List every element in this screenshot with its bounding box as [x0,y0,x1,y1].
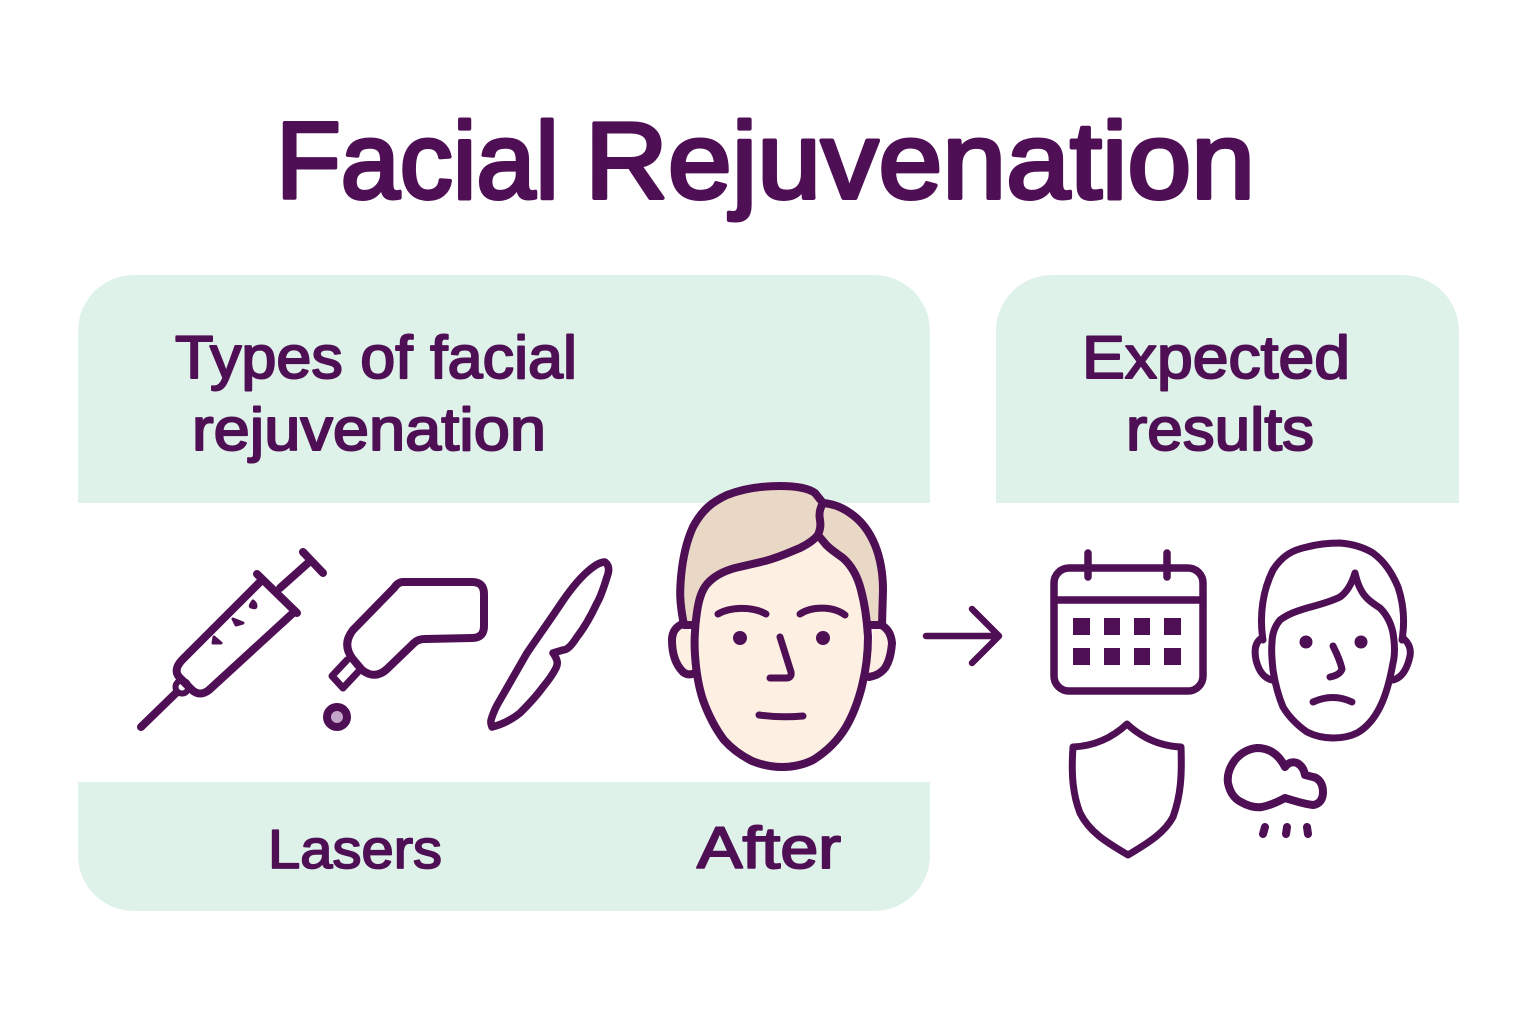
arrow [926,609,999,663]
icon: face result [1255,543,1410,738]
icon: laser device [327,582,484,727]
heading: types: rejuvenation [192,396,546,463]
icon: calendar [1054,553,1203,691]
heading: expected results: results [1126,396,1314,463]
heading: types: Types of facial [175,324,577,391]
title: Rejuvenation [585,100,1255,222]
icon: scalpel [491,562,609,727]
panel: types footer [78,782,930,911]
icon: syringe [141,552,323,727]
panel: types header [78,275,930,503]
title: Facial [276,100,559,222]
icon: rain cloud [1228,748,1323,834]
icon: shield [1072,724,1181,855]
icon: face after [672,486,892,767]
heading: expected results: Expected [1082,324,1350,391]
panel: expected results header [996,275,1459,503]
label: after: After [697,816,841,881]
label: lasers: Lasers [268,818,442,880]
